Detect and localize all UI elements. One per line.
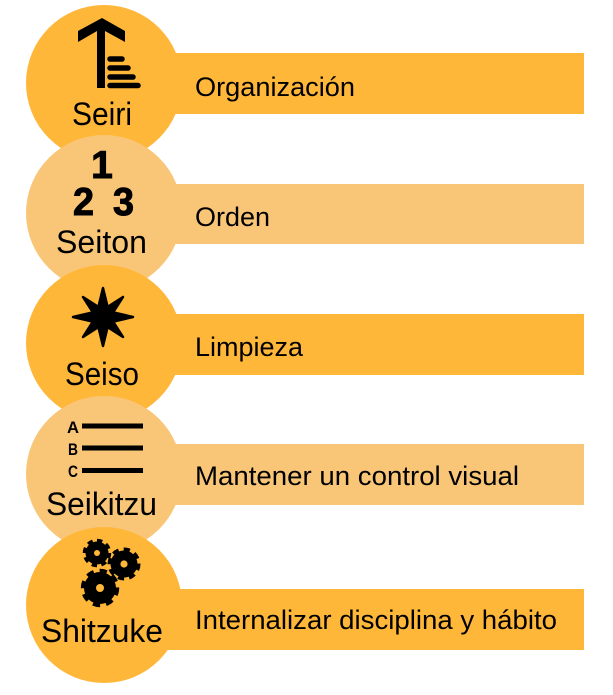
panel: Seiri xyxy=(26,5,584,161)
bar: Mantener un control visual xyxy=(104,444,584,505)
label: Seiton: Seiton xyxy=(56,224,147,260)
bar: Organización xyxy=(104,53,584,114)
circle: Seikitzu xyxy=(26,396,182,552)
panel: Shitzuke xyxy=(26,527,584,683)
label: Seiso: Seiso xyxy=(65,356,139,392)
panel: Seiso xyxy=(26,265,584,421)
bar: Orden xyxy=(104,184,584,244)
icon: eight-point star xyxy=(73,288,133,346)
text: Limpieza: Limpieza xyxy=(195,332,304,362)
label: Seikitzu: Seikitzu xyxy=(46,486,157,522)
panel: Seikitzu xyxy=(26,396,584,552)
panel: Seiton xyxy=(26,135,584,291)
icon: numbers 1 2 3: 1 xyxy=(91,144,113,187)
label: Seiri: Seiri xyxy=(72,96,132,132)
label: Shitzuke: Shitzuke xyxy=(41,613,163,649)
circle: Seiso xyxy=(26,265,182,421)
icon: gears xyxy=(83,540,138,605)
icon: A B C list: A xyxy=(67,418,79,437)
icon: numbers 1 2 3: 3 xyxy=(113,181,134,224)
text: Organización: Organización xyxy=(195,72,355,102)
text: Mantener un control visual: Mantener un control visual xyxy=(195,461,519,491)
circle: Shitzuke xyxy=(26,527,182,683)
icon: A B C list xyxy=(67,418,143,481)
icon: numbers 1 2 3: 2 xyxy=(73,181,94,224)
icon: A B C list: C xyxy=(68,462,78,481)
icon: numbers 1 2 3 xyxy=(73,144,134,224)
text: Orden: Orden xyxy=(195,202,270,232)
text: Internalizar disciplina y hábito: Internalizar disciplina y hábito xyxy=(195,605,557,635)
icon: arrow with steps xyxy=(78,18,138,88)
icon: A B C list: B xyxy=(68,440,78,459)
bar: Limpieza xyxy=(104,314,584,375)
circle: Seiton xyxy=(26,135,182,291)
bar: Internalizar disciplina y hábito xyxy=(104,589,584,650)
circle: Seiri xyxy=(26,5,182,161)
